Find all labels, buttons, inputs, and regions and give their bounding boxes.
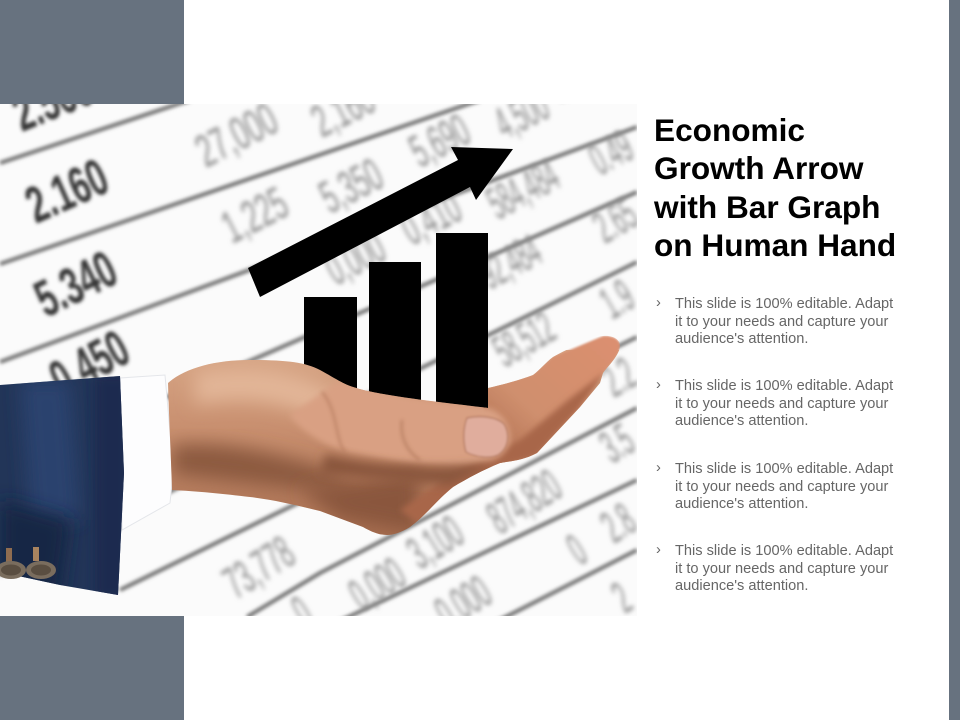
table figures: lighter columns: 3,100 [398,505,472,579]
table figures: lighter columns: 92,484 [471,224,549,299]
table figures: lighter columns: 2,160 [303,72,383,147]
table figures: bold left column [10,104,132,381]
photo: blurred financial table with hand [0,104,637,616]
table figures: lighter columns: 58,512 [484,301,564,377]
bullet 2: This slide is 100% editable. Adapt [675,378,893,394]
table figures: lighter columns: 1,225 [213,177,296,253]
bullet 3: › [656,460,661,476]
bullet 2: it to your needs and capture your [675,396,889,412]
bullet 3 [656,460,893,512]
right accent strip [949,0,960,720]
table figures: lighter columns: 0,000 [340,547,414,621]
table figures: lighter columns: 0.49 [581,120,641,185]
bar graph: three black bars [304,233,488,409]
table figures: lighter columns [192,104,637,616]
bullet 1: it to your needs and capture your [675,314,889,330]
title: on Human Hand [654,227,896,263]
table figures: lighter columns: 5,350 [311,148,391,223]
table figures: lighter columns: 0,000 [426,565,500,639]
bullet 1 [656,295,893,347]
thumb [290,380,510,464]
sleeve buttons [0,547,56,579]
bullet 1: audience's attention. [675,331,808,347]
bullet 4: it to your needs and capture your [675,561,889,577]
title: with Bar Graph [653,189,880,225]
table figures: lighter columns: 0 [558,525,595,575]
fingers [480,336,620,466]
title: Growth Arrow [654,150,864,186]
bullet 3: This slide is 100% editable. Adapt [675,461,893,477]
shirt cuff [120,375,173,530]
table figures: lighter columns: 1.9 [591,270,643,329]
table figures: lighter columns: 3.5 [591,414,643,473]
bullet 3: audience's attention. [675,496,808,512]
table figures: lighter columns: 2.65 [584,188,646,253]
table figures: lighter columns: 2.2 [593,348,645,407]
title: Economic [654,112,805,148]
table figures: bold left column: 0.450 [41,320,139,409]
table figures: bold left column: 2.560 [5,59,101,143]
bullet 2: › [656,377,661,393]
suit sleeve [0,375,130,600]
table figures: lighter columns: 73,778 [214,526,303,609]
thumbnail [464,417,508,457]
bullet list [656,295,893,594]
bullet 1: › [656,295,661,311]
rising arrow [248,147,513,297]
table figures: lighter columns: 2 [603,573,640,623]
bullet 3: it to your needs and capture your [675,479,889,495]
table figures: lighter columns: 5,690 [401,104,478,177]
table figures: bold left column: 2.160 [17,148,117,235]
table figures: lighter columns: 27,000 [188,94,286,178]
table figures: bold left column: 5.340 [26,240,126,329]
top-left accent block [0,0,184,104]
bullet 2: audience's attention. [675,413,808,429]
human hand [168,336,620,535]
table figures: lighter columns: 874,820 [478,460,570,544]
bullet 4: › [656,542,661,558]
bullet 1: This slide is 100% editable. Adapt [675,296,893,312]
table figures: lighter columns: 0 [283,586,321,637]
bottom-left accent block [0,616,184,720]
bullet 4: This slide is 100% editable. Adapt [675,543,893,559]
title [653,112,896,263]
bullet 4 [656,542,893,594]
table figures: lighter columns: 0,410 [393,181,470,255]
table figures: lighter columns: 584,484 [479,149,567,229]
table figures: lighter columns: 4,500 [486,79,557,149]
table figures: lighter columns: 2.8 [592,494,644,553]
bullet 4: audience's attention. [675,578,808,594]
bullet 2 [656,377,893,429]
table figures: lighter columns: 0,000 [317,221,394,295]
